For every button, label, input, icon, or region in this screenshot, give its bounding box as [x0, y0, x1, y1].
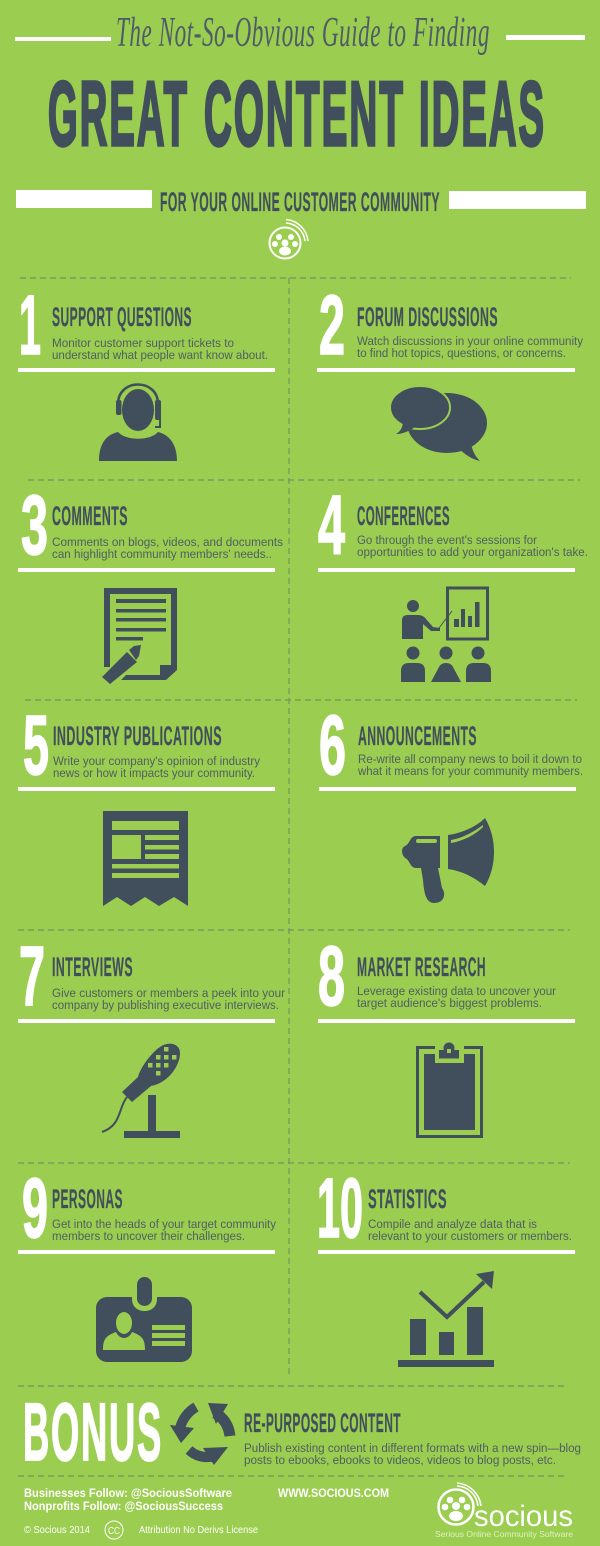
panel: 7 interviews: INTERVIEWS [52, 952, 133, 982]
description: to find hot topics, questions, or concerns. [357, 346, 566, 360]
icon: newspaper [103, 811, 188, 906]
icon: headset agent [99, 384, 177, 461]
number 6: 6 [319, 698, 346, 792]
title rule left [15, 37, 111, 41]
icon: creative commons [105, 1521, 123, 1539]
description: Comments on blogs, videos, and documents [52, 535, 283, 549]
panel: bonus [23, 1387, 581, 1478]
rule [18, 787, 275, 791]
panel: 5 industry publications [18, 698, 275, 906]
description: can highlight community members' needs.. [52, 547, 272, 561]
socious logo: socious [474, 1500, 573, 1533]
description: news or how it impacts your community. [53, 766, 255, 780]
description: company by publishing executive interviews. [52, 998, 279, 1012]
icon: megaphone [402, 818, 494, 903]
rule [18, 568, 275, 572]
icon: creative commons: CC [108, 1526, 120, 1537]
main title: GREAT [48, 64, 189, 165]
panel: 9 personas [18, 1161, 277, 1362]
panel: 4 conferences: CONFERENCES [357, 501, 450, 531]
description: Watch discussions in your online community [357, 334, 584, 348]
panel: 3 comments: COMMENTS [52, 501, 128, 531]
header [15, 10, 586, 258]
socious logo [435, 1483, 573, 1539]
icon: presenter and audience [401, 588, 491, 682]
website: WWW.SOCIOUS.COM [278, 1486, 389, 1500]
panel: 1 support questions: 1 [19, 278, 41, 372]
icon: id badge [96, 1277, 192, 1362]
panel: 5 industry publications: INDUSTRY PUBLICATIONS [53, 721, 222, 751]
description: Leverage existing data to uncover your [357, 984, 556, 998]
number 4: 4 [318, 478, 345, 572]
number 8: 8 [318, 929, 345, 1023]
description: members to uncover their challenges. [52, 1229, 245, 1243]
socious logo: Serious Online Community Software [435, 1529, 573, 1539]
rule [318, 568, 575, 572]
panel: bonus: BONUS [23, 1387, 163, 1478]
icon: rising bar chart [398, 1271, 494, 1367]
panel: 9 personas: PERSONAS [52, 1184, 123, 1214]
title rule right [506, 35, 585, 40]
description: what it means for your community members. [357, 764, 583, 778]
number 7: 7 [19, 929, 45, 1023]
footer [24, 1483, 573, 1539]
rule [318, 1019, 575, 1023]
panel: 8 market research [318, 929, 575, 1136]
panel: 6 announcements [319, 698, 583, 903]
panel: 10 statistics: STATISTICS [368, 1184, 447, 1214]
panel: 2 forum discussions [317, 278, 584, 461]
icon: clipboard [418, 1042, 482, 1136]
icon: speech bubbles [390, 386, 487, 461]
description: target audience's biggest problems. [357, 996, 542, 1010]
panel: 7 interviews [18, 929, 285, 1138]
copyright: © Socious 2014 [24, 1525, 90, 1536]
rule [18, 368, 275, 372]
panel: 10 statistics [317, 1161, 575, 1367]
description: Re-write all company news to boil it down to [358, 752, 582, 766]
panel: 3 comments [18, 478, 283, 684]
rule [318, 1250, 575, 1254]
social links: Nonprofits Follow: @SociousSuccess [24, 1499, 223, 1513]
description: Go through the event's sessions for [357, 533, 537, 547]
description: Get into the heads of your target community [52, 1217, 277, 1231]
panel: 10 statistics: 10 [317, 1161, 363, 1255]
panel: 4 conferences [318, 478, 588, 682]
description: Monitor customer support tickets to [52, 336, 234, 350]
description: Give customers or members a peek into your [52, 986, 285, 1000]
panel: bonus: RE-PURPOSED CONTENT [244, 1408, 401, 1438]
description: Compile and analyze data that is [368, 1217, 537, 1231]
icon: microphone [102, 1044, 180, 1138]
rule [18, 1250, 275, 1254]
icon: recycle arrows [170, 1403, 230, 1465]
number 2: 2 [319, 278, 345, 372]
license: Attribution No Derivs License [139, 1525, 258, 1536]
subtitle bar left [16, 190, 152, 208]
number 9: 9 [22, 1161, 48, 1255]
rule [18, 1019, 275, 1023]
social links: Businesses Follow: @SociousSoftware [24, 1486, 232, 1500]
subtitle bar right [449, 191, 586, 209]
panel: 1 support questions: SUPPORT QUESTIONS [52, 302, 192, 332]
description: understand what people want know about. [52, 348, 268, 362]
description: Write your company's opinion of industry [53, 754, 261, 768]
icon: socious logo [270, 220, 308, 258]
description: Publish existing content in different formats with a new spin—blog [244, 1441, 581, 1455]
panel: 1 support questions [18, 278, 275, 461]
description: relevant to your customers or members. [368, 1229, 572, 1243]
icon: document and pencil [102, 588, 177, 684]
number 3: 3 [21, 478, 48, 572]
description: posts to ebooks, ebooks to videos, videos to blog posts, etc. [244, 1453, 556, 1467]
main title [48, 64, 546, 165]
rule [317, 368, 575, 372]
number 5: 5 [23, 698, 49, 792]
rule [319, 787, 576, 791]
description: opportunities to add your organization's take. [357, 545, 588, 559]
